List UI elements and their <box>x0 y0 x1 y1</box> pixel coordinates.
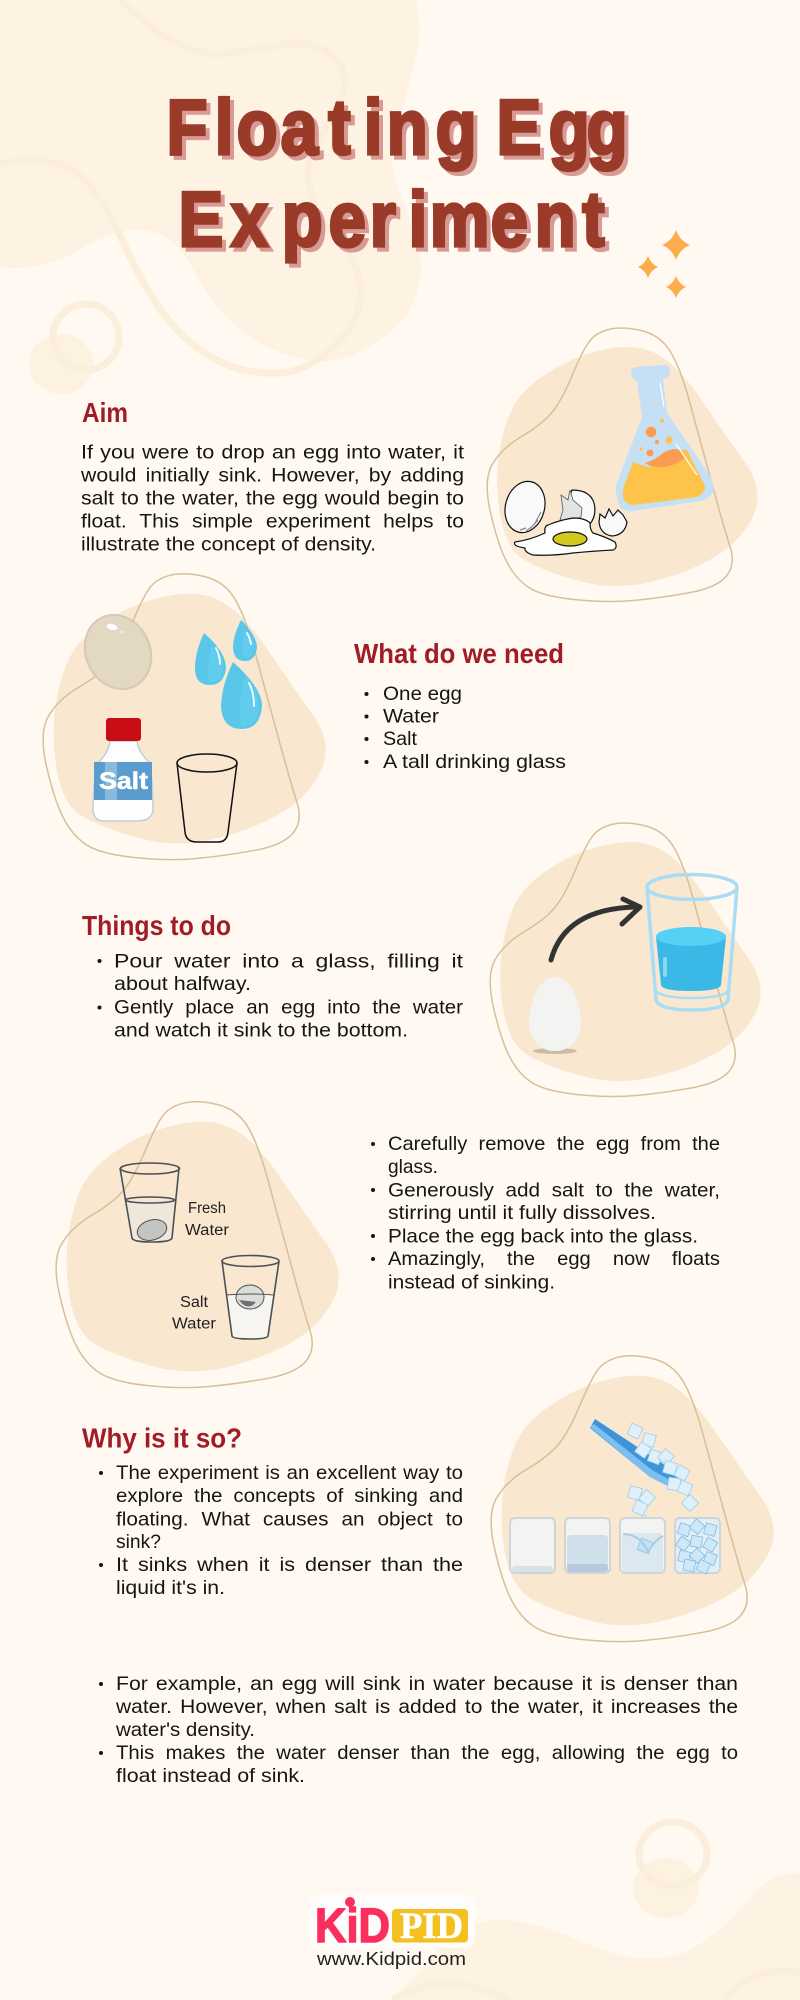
label: salt water <box>172 1294 216 1332</box>
heading: what do we need: What do we need <box>354 638 564 669</box>
label: salt water: Water <box>172 1316 216 1332</box>
label: fresh water: Fresh <box>188 1200 226 1217</box>
label: fresh water: Water <box>185 1222 229 1239</box>
list: ingredients: Water <box>383 706 440 728</box>
list: salt water steps: Carefully remove the egg from the <box>388 1133 720 1155</box>
list: explanation: explore the concepts of sinking and <box>116 1485 463 1507</box>
logo: Kidpid: KiD <box>315 1900 390 1953</box>
list: explanation: The experiment is an excellent way to <box>116 1462 463 1484</box>
list: explanation <box>99 1462 463 1599</box>
list: first steps: Gently place an egg into the water <box>114 997 464 1019</box>
text block: aim: If you were to drop an egg into water, it <box>81 442 465 464</box>
text block: density explanation: water. However, when salt is added to the water, it increases the <box>115 1696 738 1718</box>
list: explanation: sink? <box>116 1531 161 1553</box>
icon: salt water glass <box>222 1256 279 1339</box>
text block: density explanation: This makes the water denser than the egg, allowing the egg to <box>116 1742 738 1764</box>
list: salt water steps: Generously add salt to the water, <box>388 1180 720 1202</box>
list: ingredients <box>364 683 566 773</box>
list: salt water steps: Place the egg back into the glass. <box>388 1225 698 1247</box>
list: ingredients: One egg <box>383 683 462 705</box>
list: salt water steps: glass. <box>388 1156 438 1178</box>
panel: things to do <box>82 823 761 1097</box>
icon: sparkles <box>638 230 690 298</box>
list: explanation: floating. What causes an object to <box>116 1508 463 1530</box>
icon: salt bottle: Salt <box>99 768 148 795</box>
icon: fresh water glass <box>120 1163 180 1244</box>
text block: density explanation: For example, an egg will sink in water because it is denser than <box>116 1673 738 1695</box>
panel: what do we need <box>43 574 566 860</box>
icon: falling ice cubes <box>627 1423 698 1531</box>
text block: density explanation: float instead of sink. <box>116 1765 305 1787</box>
list: explanation: liquid it's in. <box>116 1577 225 1599</box>
background decoration: top left blobs <box>0 0 421 394</box>
list: salt water steps: Amazingly, the egg now floats <box>388 1248 720 1270</box>
heading: things to do: Things to do <box>82 910 231 941</box>
background decoration: bottom right blobs <box>392 1822 800 2000</box>
icon: flask <box>616 365 714 511</box>
list: salt water steps: stirring until it fully dissolves. <box>388 1202 656 1224</box>
illustration: ingredients on blob <box>43 574 326 860</box>
icon: cracked eggs <box>499 477 627 555</box>
list: first steps: about halfway. <box>114 973 251 995</box>
text block: density explanation <box>99 1673 738 1787</box>
icon: water drops <box>195 620 262 729</box>
list: explanation: It sinks when it is denser than the <box>116 1554 463 1576</box>
icon: empty glass <box>177 754 237 842</box>
list: ingredients: A tall drinking glass <box>383 751 566 773</box>
panel: salt water step <box>56 1102 720 1388</box>
text block: aim: illustrate the concept of density. <box>81 534 376 556</box>
list: first steps <box>98 950 464 1042</box>
illustration: egg and glass on blob <box>490 823 761 1097</box>
list: first steps: and watch it sink to the bottom. <box>114 1020 408 1042</box>
text block: aim: would initially sink. However, by adding <box>80 464 464 486</box>
text block: aim: salt to the water, the egg would begin to <box>81 488 464 510</box>
icon: beakers <box>510 1518 720 1574</box>
text block: density explanation: water's density. <box>115 1719 255 1741</box>
illustration: ice tray and beakers on blob <box>491 1356 774 1642</box>
illustration: fresh and salt water glasses on blob <box>56 1102 339 1388</box>
illustration: flask and eggs on blob <box>487 328 758 602</box>
icon: salt bottle <box>93 718 153 821</box>
title: Floating Egg <box>170 88 632 175</box>
icon: brown egg <box>73 604 163 700</box>
panel: aim <box>80 328 758 602</box>
icon: white egg <box>529 977 581 1054</box>
icon: glass of water <box>647 874 737 1010</box>
text block: aim <box>80 442 465 556</box>
list: salt water steps: instead of sinking. <box>388 1272 555 1294</box>
heading: why is it so: Why is it so? <box>82 1422 242 1454</box>
title: Experiment <box>179 176 605 263</box>
icon: arrow <box>551 899 640 960</box>
logo: Kidpid: PID <box>400 1906 463 1947</box>
logo: Kidpid: www.Kidpid.com <box>316 1949 466 1969</box>
icon: ice tray <box>590 1419 680 1486</box>
label: salt water: Salt <box>180 1294 209 1311</box>
panel: why is it so <box>82 1356 774 1642</box>
label: fresh water <box>185 1200 229 1239</box>
text block: aim: float. This simple experiment helps to <box>81 510 464 532</box>
list: ingredients: Salt <box>383 728 418 750</box>
list: first steps: Pour water into a glass, filling it <box>114 950 464 972</box>
logo: Kidpid <box>309 1894 475 1969</box>
title: Experiment <box>183 180 609 267</box>
heading: aim: Aim <box>82 397 128 428</box>
list: salt water steps <box>371 1133 720 1294</box>
title <box>166 84 632 267</box>
title: Floating Egg <box>166 84 628 171</box>
